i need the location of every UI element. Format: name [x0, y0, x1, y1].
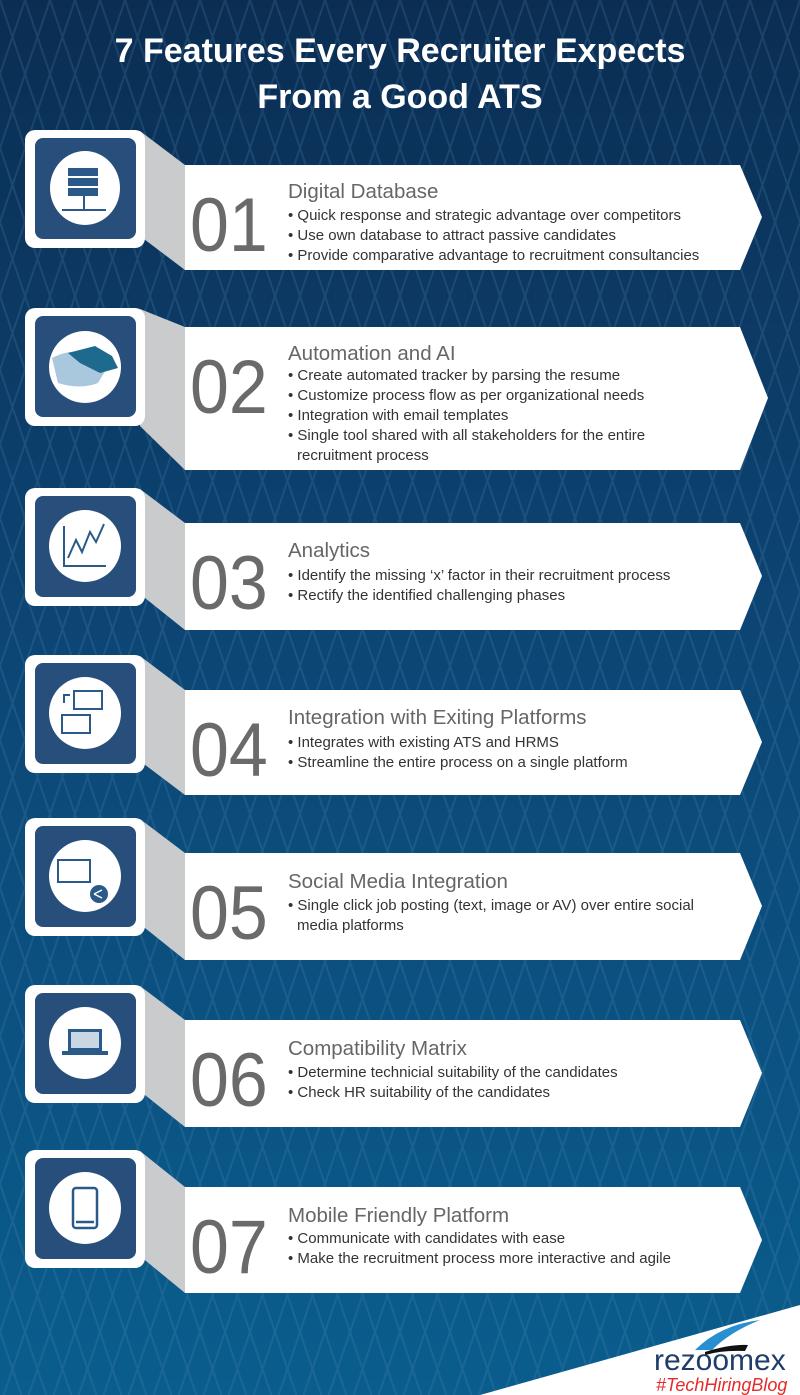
bullets: • Provide comparative advantage to recruitment consultancies — [288, 247, 699, 264]
brand: rezoomex — [654, 1344, 786, 1377]
bullets: • Use own database to attract passive candidates — [288, 227, 616, 244]
icon: swoosh — [695, 1320, 760, 1355]
item 5: Social Media: 05 — [190, 871, 268, 956]
item 3: Analytics: 03 — [190, 541, 268, 626]
icon: monitors — [62, 691, 102, 733]
heading: Digital Database — [288, 180, 438, 203]
heading: Compatibility Matrix — [288, 1037, 467, 1060]
bullets — [288, 567, 670, 604]
item 7: Mobile: 07 — [190, 1205, 268, 1290]
bullets: recruitment process — [297, 447, 429, 464]
icon: phone — [73, 1188, 97, 1228]
bullets: • Streamline the entire process on a single platform — [288, 754, 628, 771]
bullets: • Make the recruitment process more interactive and agile — [288, 1250, 671, 1267]
bullets: • Determine technicial suitability of the candidates — [288, 1064, 618, 1081]
bullets: • Integration with email templates — [288, 407, 508, 424]
bullets: • Quick response and strategic advantage over competitors — [288, 207, 681, 224]
logo corner — [480, 1305, 800, 1395]
bullets: • Communicate with candidates with ease — [288, 1230, 565, 1247]
item 4: Integration — [25, 655, 762, 795]
bullets: • Check HR suitability of the candidates — [288, 1084, 550, 1101]
heading: Analytics — [288, 539, 370, 562]
item 2: Automation and AI: 02 — [190, 345, 268, 430]
item 7: Mobile — [25, 1150, 762, 1293]
icon: laptop — [62, 1029, 108, 1055]
bullets: • Single tool shared with all stakeholders for the entire — [288, 427, 645, 444]
bullets: • Identify the missing ‘x’ factor in their recruitment process — [288, 567, 670, 584]
icon: share — [58, 860, 108, 903]
bullets: • Integrates with existing ATS and HRMS — [288, 734, 559, 751]
item 4: Integration: 04 — [190, 708, 268, 793]
item 6: Compatibility Matrix: 06 — [190, 1038, 268, 1123]
item 3: Analytics — [25, 488, 762, 630]
bullets — [288, 367, 645, 464]
bullets — [288, 1064, 618, 1101]
hashtag: #TechHiringBlog — [656, 1375, 787, 1395]
bullets — [288, 897, 694, 934]
bullets: • Create automated tracker by parsing the resume — [288, 367, 620, 384]
item 2: Automation and AI — [25, 308, 768, 470]
heading: Integration with Exiting Platforms — [288, 706, 587, 729]
bullets: media platforms — [297, 917, 404, 934]
icon: chart — [64, 524, 106, 566]
bullets: • Single click job posting (text, image or AV) over entire social — [288, 897, 694, 914]
heading: Mobile Friendly Platform — [288, 1204, 509, 1227]
item 6: Compatibility Matrix — [25, 985, 762, 1127]
heading: Automation and AI — [288, 342, 456, 365]
bullets — [288, 734, 628, 771]
item 1: Digital Database: 01 — [190, 183, 268, 268]
bullets: • Rectify the identified challenging phases — [288, 587, 565, 604]
item 1: Digital Database — [25, 130, 762, 270]
bullets — [288, 1230, 671, 1267]
heading: Social Media Integration — [288, 870, 508, 893]
title: From a Good ATS — [257, 78, 543, 116]
title: 7 Features Every Recruiter Expects — [115, 32, 685, 70]
item 5: Social Media — [25, 818, 762, 960]
bullets — [288, 207, 699, 264]
bullets: • Customize process flow as per organizational needs — [288, 387, 644, 404]
icon: handshake — [52, 346, 118, 386]
title — [115, 32, 685, 116]
icon: server — [62, 168, 106, 211]
